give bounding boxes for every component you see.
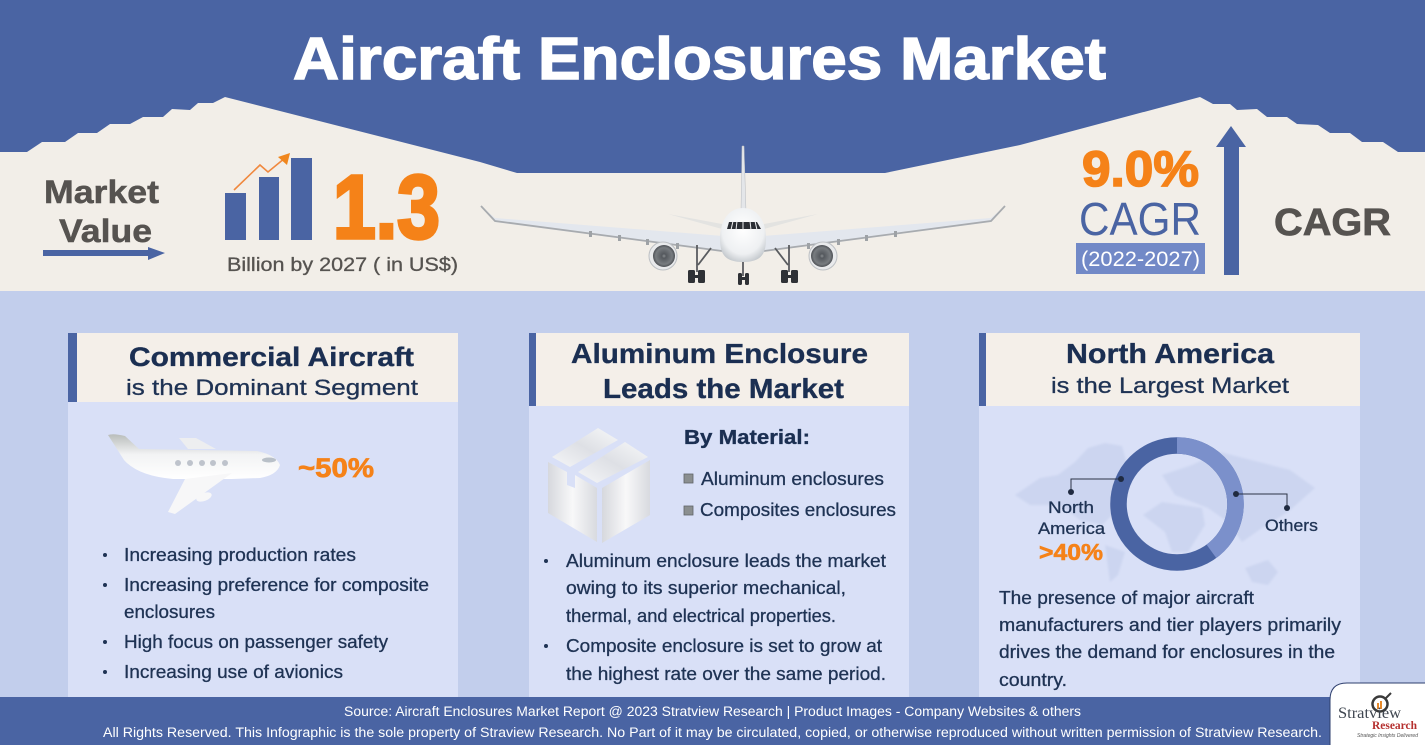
icon: box [548,428,650,543]
callout: others: Others [1265,516,1318,535]
illustration: airliner front view [481,146,1005,285]
panel: aluminum enclosure: Leads the Market [603,373,844,404]
bullet list: Increasing use of avionics [124,662,343,682]
description: drives the demand for enclosures in the [999,642,1335,662]
footer [0,697,1425,745]
bullet list: thermal, and electrical properties. [566,606,836,626]
description: manufacturers and tier players primarily [999,615,1341,635]
bullet list: enclosures [124,602,215,622]
panel: commercial aircraft: is the Dominant Segment [126,375,418,400]
bullet list: High focus on passenger safety [124,632,388,652]
market value label [43,174,165,260]
legend: by material [684,427,896,520]
bullet list [544,551,886,684]
logo: Stratview Research: Stratview [1338,705,1401,722]
description: The presence of major aircraft [999,588,1254,608]
CAGR label: CAGR [1274,202,1391,244]
fuselage [720,208,766,262]
CAGR figures: (2022-2027) [1081,248,1200,271]
bullet list: Aluminum enclosure leads the market [566,551,886,571]
bullet list: Composite enclosure is set to grow at [566,636,882,656]
legend: by material: Composites enclosures [700,500,896,520]
description [999,588,1341,690]
icon: bar chart with rising arrow [225,153,312,240]
callout: north america [1038,476,1124,565]
description: country. [999,670,1067,690]
banner: beige mountain silhouette [0,97,1425,291]
panel: commercial aircraft [68,333,458,697]
legend: by material: Aluminum enclosures [701,469,884,489]
logo: Stratview Research: Research [1372,718,1417,732]
bullet list: the highest rate over the same period. [566,664,886,684]
bullet list: owing to its superior mechanical, [566,578,846,598]
CAGR figures [1076,141,1205,274]
legend: by material: By Material: [684,427,810,449]
market value number: 1.3 [333,158,440,258]
panel: north america: North America [1066,338,1274,369]
landing gear [697,245,789,276]
callout: north america: America [1038,519,1106,538]
CAGR figures: 9.0% [1082,141,1199,197]
market value label: Value [59,213,152,249]
arrow: up [1216,126,1246,275]
stat: ~50% [298,453,374,483]
callout: north america: North [1048,498,1094,517]
header band: blue [0,0,1425,200]
world map [1015,443,1315,585]
panel: aluminum enclosure [529,333,909,697]
logo: Stratview Research: Strategic Insights Delivered [1357,733,1419,739]
panel: north america: is the Largest Market [1051,373,1289,398]
panel: aluminum enclosure: Aluminum Enclosure [571,338,868,369]
icon: white airplane [108,434,280,514]
title: Aircraft Enclosures Market [293,26,1106,92]
callout: others [1233,491,1318,535]
market value caption: Billion by 2027 ( in US$) [227,255,458,276]
callout: north america: >40% [1039,539,1103,565]
footer: All Rights Reserved. This Infographic is the sole property of Straview Research. No Part of it may be circulated, copied, or otherwise reproduced without written permission of Stratview Research. [103,725,1322,740]
engines [649,242,677,270]
panel: commercial aircraft: Commercial Aircraft [129,342,414,372]
market value label: Market [44,174,159,210]
CAGR figures: CAGR [1079,193,1201,245]
panel: north america [979,333,1360,697]
donut chart [1118,446,1236,562]
footer: Source: Aircraft Enclosures Market Report @ 2023 Stratview Research | Product Images - Company Websites & others [344,704,1081,719]
bullet list [103,545,429,682]
bullet list: Increasing preference for composite [124,575,429,595]
logo: Stratview Research [1330,683,1425,745]
bullet list: Increasing production rates [124,545,356,565]
